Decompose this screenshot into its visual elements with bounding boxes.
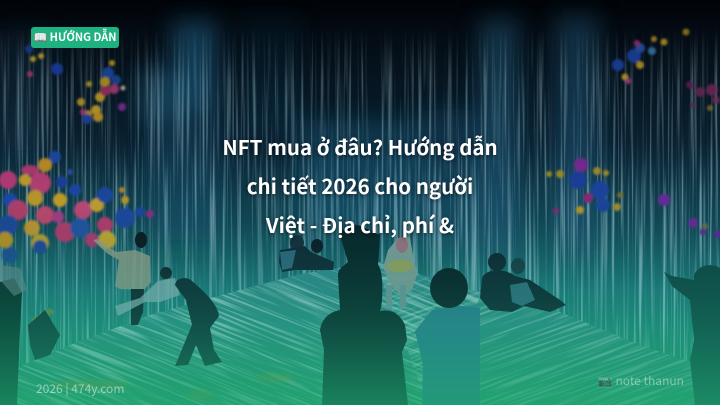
flower cluster: far right (686, 81, 720, 111)
people: woman in floral dress (383, 237, 418, 309)
blue haze columns (0, 15, 598, 258)
flower cluster: left (0, 151, 154, 263)
flower cluster: top right (612, 28, 690, 84)
photo credit: 📷 note thanun (598, 372, 684, 389)
people: figure in black, foreground (320, 225, 408, 405)
footer: year and site: 2026 | 474y.com (36, 380, 124, 397)
people: left edge figures (0, 265, 60, 405)
title: chi tiết 2026 cho người (247, 170, 473, 200)
title: NFT mua ở đâu? Hướng dẫn (222, 131, 498, 161)
people: foreground person in teal jacket (415, 268, 480, 405)
people: standing man right edge (664, 265, 720, 405)
title: Việt - Địa chỉ, phí & (266, 209, 454, 239)
flower cluster: right (546, 158, 720, 238)
people: crouching dark figure (175, 278, 222, 366)
people: seated pair (279, 235, 334, 272)
people: woman with raised arm (93, 232, 151, 325)
badge: category: 📖 HƯỚNG DẪN (33, 29, 117, 45)
title (222, 131, 498, 240)
flower cluster: top left (25, 45, 126, 124)
illuminated hill (17, 262, 694, 405)
people: seated trio right (480, 253, 566, 312)
people: seated person in white (115, 267, 180, 316)
